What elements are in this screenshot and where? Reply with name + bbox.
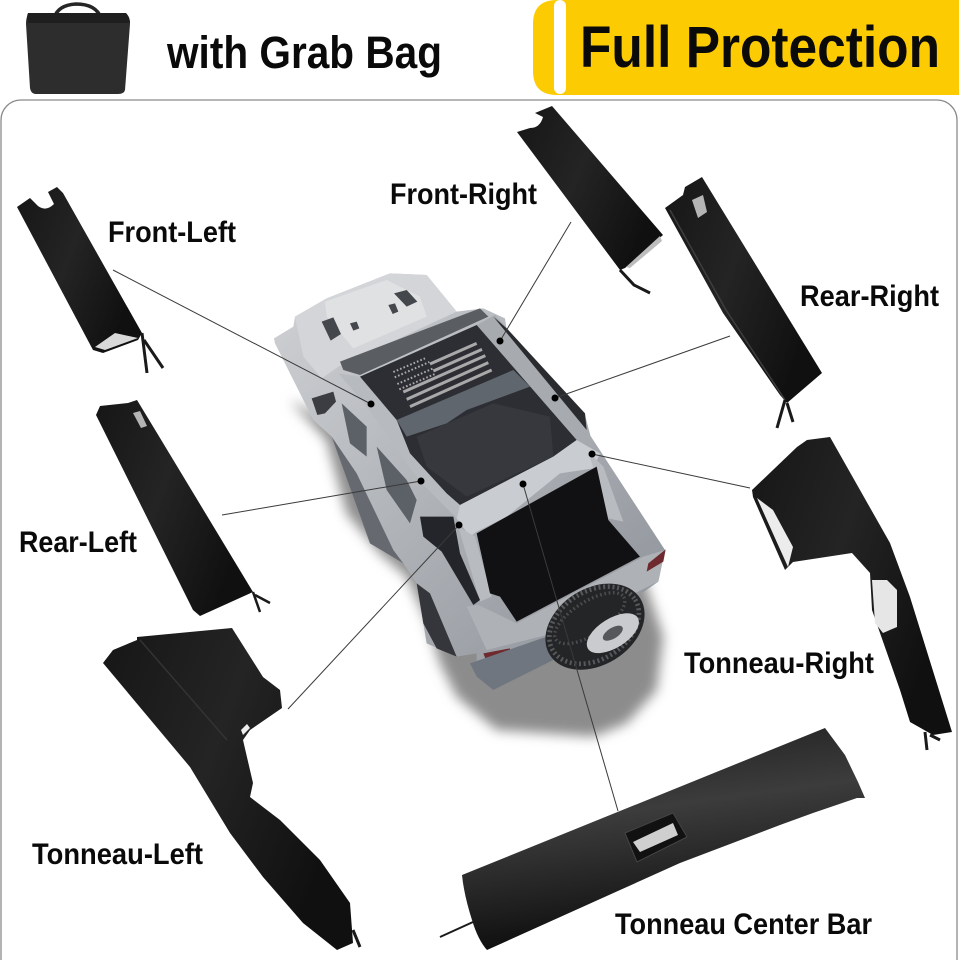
icon: grab bag	[26, 4, 130, 94]
part: rear-left	[96, 400, 270, 616]
rear roll bar	[457, 440, 600, 537]
left roof rail	[338, 373, 460, 518]
spare tire	[529, 566, 661, 687]
part: tonneau-left	[103, 628, 360, 950]
part: tonneau center bar	[440, 728, 865, 950]
sun shade mesh	[360, 325, 577, 505]
attachment dots	[368, 338, 596, 528]
jeep with sun shade	[274, 273, 666, 737]
left floor shadow strip	[332, 437, 403, 563]
right roof rail	[477, 315, 593, 447]
part: front-left	[17, 187, 163, 373]
windshield frame	[340, 308, 488, 375]
label: tonneau-right: Tonneau-Right	[684, 647, 874, 680]
door windows	[342, 403, 417, 523]
left mirror	[312, 392, 336, 415]
american flag on mesh	[393, 343, 492, 407]
label: front-left: Front-Left	[108, 216, 236, 249]
part: front-right	[517, 106, 663, 293]
part: rear-right	[665, 177, 822, 428]
label: tonneau center bar: Tonneau Center Bar	[615, 908, 872, 941]
rear passenger footwell	[420, 517, 480, 605]
interior seen through mesh	[397, 370, 530, 437]
tail lights	[483, 549, 666, 670]
part: tonneau-right	[752, 437, 952, 750]
rear tub edge	[467, 550, 665, 650]
label: tonneau-left: Tonneau-Left	[32, 838, 203, 871]
rear side posts	[458, 452, 623, 602]
leader lines	[113, 222, 750, 811]
banner: full protection	[533, 0, 959, 95]
hood centre panel	[325, 280, 427, 348]
heading: with grab bag: with Grab Bag	[166, 27, 442, 78]
label: front-right: Front-Right	[390, 178, 537, 211]
rear bumper	[470, 637, 553, 690]
jeep shadow	[290, 400, 663, 737]
label: rear-left: Rear-Left	[19, 526, 137, 559]
rear wheel	[417, 583, 457, 657]
jeep body	[274, 273, 665, 690]
hood	[295, 273, 457, 378]
cargo area	[477, 467, 640, 622]
label: rear-right: Rear-Right	[800, 280, 939, 313]
hood vents	[322, 290, 417, 341]
